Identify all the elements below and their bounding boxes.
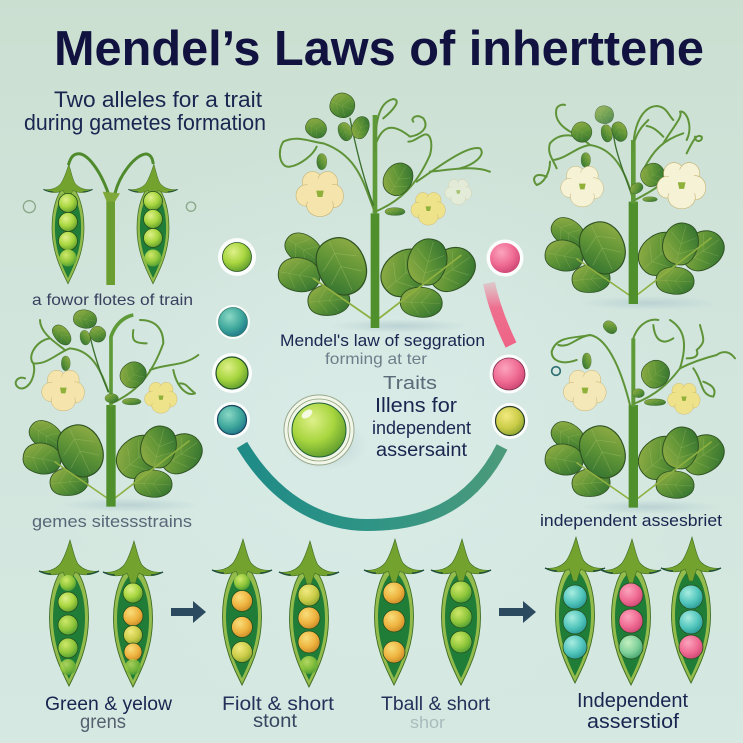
caption: tball and short: Tball & short <box>381 694 491 715</box>
center text block <box>280 331 485 461</box>
caption: tball and short: shor <box>410 713 445 732</box>
pod: 2 <box>103 541 163 687</box>
center text block: Mendel's law of seggration <box>280 331 485 350</box>
pod: 4 <box>279 541 339 687</box>
pod: 3 <box>212 539 272 685</box>
pod: 9 <box>661 537 721 683</box>
center text block: Traits <box>383 373 437 393</box>
caption: middle left: gemes sitessstrains <box>32 512 192 531</box>
caption: fiolt and short <box>222 694 335 732</box>
pod: 6 <box>431 539 491 685</box>
caption: independent assortment: Independent <box>577 690 688 712</box>
caption: green and yellow <box>45 694 172 733</box>
subtitle text <box>24 87 266 135</box>
caption: middle right: independent assesbriet <box>540 511 722 530</box>
plant: top right <box>534 104 731 310</box>
caption: pods: a fowor flotes of train <box>32 292 193 309</box>
pod: 1 <box>39 540 99 686</box>
allele: right 1 <box>486 240 524 276</box>
diagram: allele arc <box>212 238 528 525</box>
allele: right 2 <box>490 354 528 394</box>
pod: 7 <box>545 537 605 683</box>
center text block: Illens for <box>375 395 457 417</box>
caption: tball and short <box>381 694 491 732</box>
allele: left 1 <box>218 238 256 276</box>
allele: central pea <box>284 395 368 471</box>
arrow: first <box>171 601 206 623</box>
center text block: forming at ter <box>325 351 428 368</box>
arrow: second <box>499 601 536 623</box>
pod: 8 <box>601 539 661 685</box>
plant: middle right <box>543 318 735 514</box>
subtitle text: Two alleles for a trait <box>54 87 262 112</box>
center text block: independent <box>372 418 471 438</box>
center text block: assersaint <box>376 440 468 461</box>
arc: pink connector <box>489 283 511 345</box>
caption: fiolt and short: Fiolt & short <box>222 694 335 715</box>
bottom pods row <box>39 537 721 687</box>
pod: 5 <box>364 539 424 685</box>
caption: green and yellow: Green & yelow <box>45 694 172 715</box>
title: Mendel’s Laws of inherttene <box>54 22 704 76</box>
caption: fiolt and short: stont <box>253 711 298 732</box>
caption: independent assortment <box>577 690 688 733</box>
icon: forked stem <box>23 154 196 285</box>
allele: left 4 <box>214 402 250 438</box>
caption: green and yellow: grens <box>80 712 126 733</box>
caption: independent assortment: asserstiof <box>587 711 679 733</box>
allele: left 3 <box>212 353 252 393</box>
panel: top-left pea pods on a stem <box>23 154 196 285</box>
icon: left pod <box>43 164 93 284</box>
icon: right pod <box>128 164 178 284</box>
plant: center <box>276 90 490 333</box>
allele: left 2 <box>216 305 250 339</box>
allele: right 3 <box>492 403 528 439</box>
plant: middle left <box>16 308 209 512</box>
arc: teal connector <box>242 445 502 525</box>
subtitle text: during gametes formation <box>24 110 266 135</box>
